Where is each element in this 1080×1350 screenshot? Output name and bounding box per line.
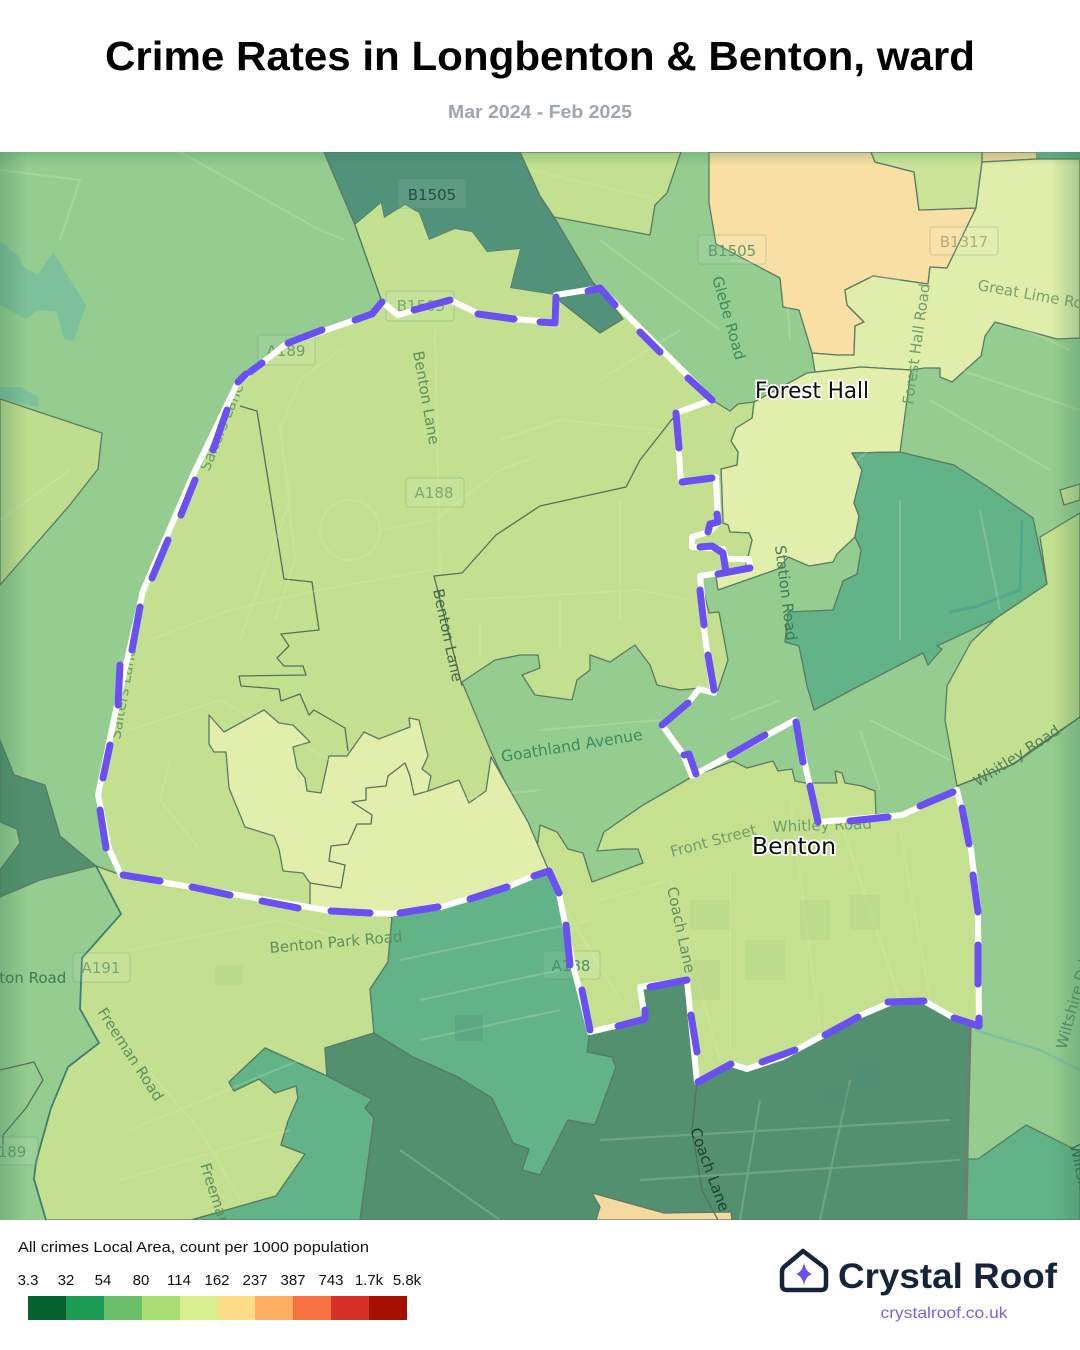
legend values: 3.3 bbox=[18, 1272, 38, 1289]
area: bottom orange bbox=[592, 1193, 732, 1220]
area: Whitley light bbox=[945, 513, 1080, 786]
road labels: Whitley Road bbox=[773, 815, 872, 836]
road labels: Coach Lane bbox=[663, 885, 699, 975]
legend values: 80 bbox=[133, 1272, 149, 1289]
area: Benton ward south bbox=[537, 761, 979, 1082]
area: south-west pale bbox=[34, 866, 392, 1220]
legend values: 237 bbox=[242, 1272, 268, 1289]
road labels: Freeman Road bbox=[94, 1004, 167, 1104]
area: north-east pale bbox=[871, 152, 982, 210]
area: Forest Hall pale bbox=[716, 367, 911, 590]
area: south-west mid-dark bbox=[191, 1048, 374, 1220]
icon: house with star bbox=[782, 1251, 826, 1290]
road labels: Freeman Road bbox=[196, 1161, 247, 1269]
logo: Crystal Roof bbox=[782, 1251, 1057, 1322]
area: north light bbox=[520, 152, 681, 235]
legend values: 54 bbox=[95, 1272, 111, 1289]
area: dark wedge inside boundary bbox=[557, 289, 623, 333]
area: northern ward strip bbox=[355, 203, 556, 322]
area: Longbenton ward main bbox=[98, 288, 754, 914]
river bbox=[34, 866, 121, 1220]
area: dark north bbox=[323, 152, 596, 295]
road labels: B1317 bbox=[940, 233, 988, 251]
area: central south mid-dark bbox=[370, 871, 616, 1175]
road labels: B1505 bbox=[397, 297, 445, 315]
minor road network bbox=[0, 152, 1080, 1220]
legend values: 743 bbox=[318, 1272, 344, 1289]
road labels: A189 bbox=[267, 342, 305, 360]
road shields bbox=[0, 179, 998, 1165]
map edge vignette bbox=[0, 152, 23, 1220]
legend values: 114 bbox=[167, 1272, 191, 1289]
road labels: B1505 bbox=[708, 242, 756, 260]
road labels: Salters Lane bbox=[106, 646, 140, 741]
road labels: Salters Lane bbox=[196, 380, 248, 473]
road labels: Benton Park Road bbox=[269, 927, 403, 957]
boundary lines bbox=[0, 406, 1080, 1220]
road labels: Whitley Road bbox=[970, 721, 1063, 790]
school blocks bbox=[690, 895, 880, 1000]
ward boundary: purple dashes bbox=[100, 288, 979, 1082]
area: dark south bbox=[325, 980, 971, 1220]
legend title: All crimes Local Area, count per 1000 population bbox=[18, 1239, 369, 1256]
subtitle: date range: Mar 2024 - Feb 2025 bbox=[448, 102, 632, 122]
road labels: Station Road bbox=[771, 544, 801, 642]
legend bbox=[18, 1239, 422, 1320]
area: south-west dark bbox=[0, 740, 96, 897]
area: small east parcel bbox=[1060, 484, 1080, 505]
legend values: 387 bbox=[280, 1272, 306, 1289]
area: pale centre bbox=[209, 710, 549, 914]
road labels: Goathland Avenue bbox=[500, 726, 644, 766]
legend values: 32 bbox=[58, 1272, 74, 1289]
title: Crime Rates in Longbenton & Benton, ward bbox=[105, 33, 975, 79]
place label: Benton: Benton bbox=[752, 834, 836, 860]
legend values: 1.7k bbox=[355, 1272, 384, 1289]
road labels: Glebe Road bbox=[708, 274, 749, 362]
road labels: Benton Lane bbox=[429, 587, 466, 683]
road labels: Coach Lane bbox=[686, 1125, 733, 1214]
road labels: A191 bbox=[82, 959, 120, 977]
road labels: Front Street bbox=[668, 821, 758, 861]
ward boundary: white underlay bbox=[98, 288, 979, 1082]
road labels: B1505 bbox=[408, 186, 456, 204]
water patch bbox=[0, 241, 86, 341]
legend values: 162 bbox=[204, 1272, 230, 1289]
road labels: A188 bbox=[552, 957, 590, 975]
legend values: 5.8k bbox=[393, 1272, 422, 1289]
area: mid-dark east bbox=[785, 452, 1047, 710]
road labels: Benton Lane bbox=[409, 350, 443, 446]
area: western parcel bbox=[0, 399, 102, 585]
area: orange high crime bbox=[709, 152, 976, 355]
website: crystalroof.co.uk bbox=[880, 1305, 1009, 1322]
legend values bbox=[18, 1272, 422, 1289]
legend colour scale bbox=[28, 1296, 407, 1320]
logo wordmark: Crystal Roof bbox=[838, 1257, 1057, 1296]
road labels: Forest Hall Road bbox=[899, 282, 934, 406]
place label: Forest Hall: Forest Hall bbox=[755, 379, 869, 404]
road labels: A188 bbox=[415, 484, 453, 502]
area: south-east mid-dark bbox=[966, 1125, 1080, 1220]
